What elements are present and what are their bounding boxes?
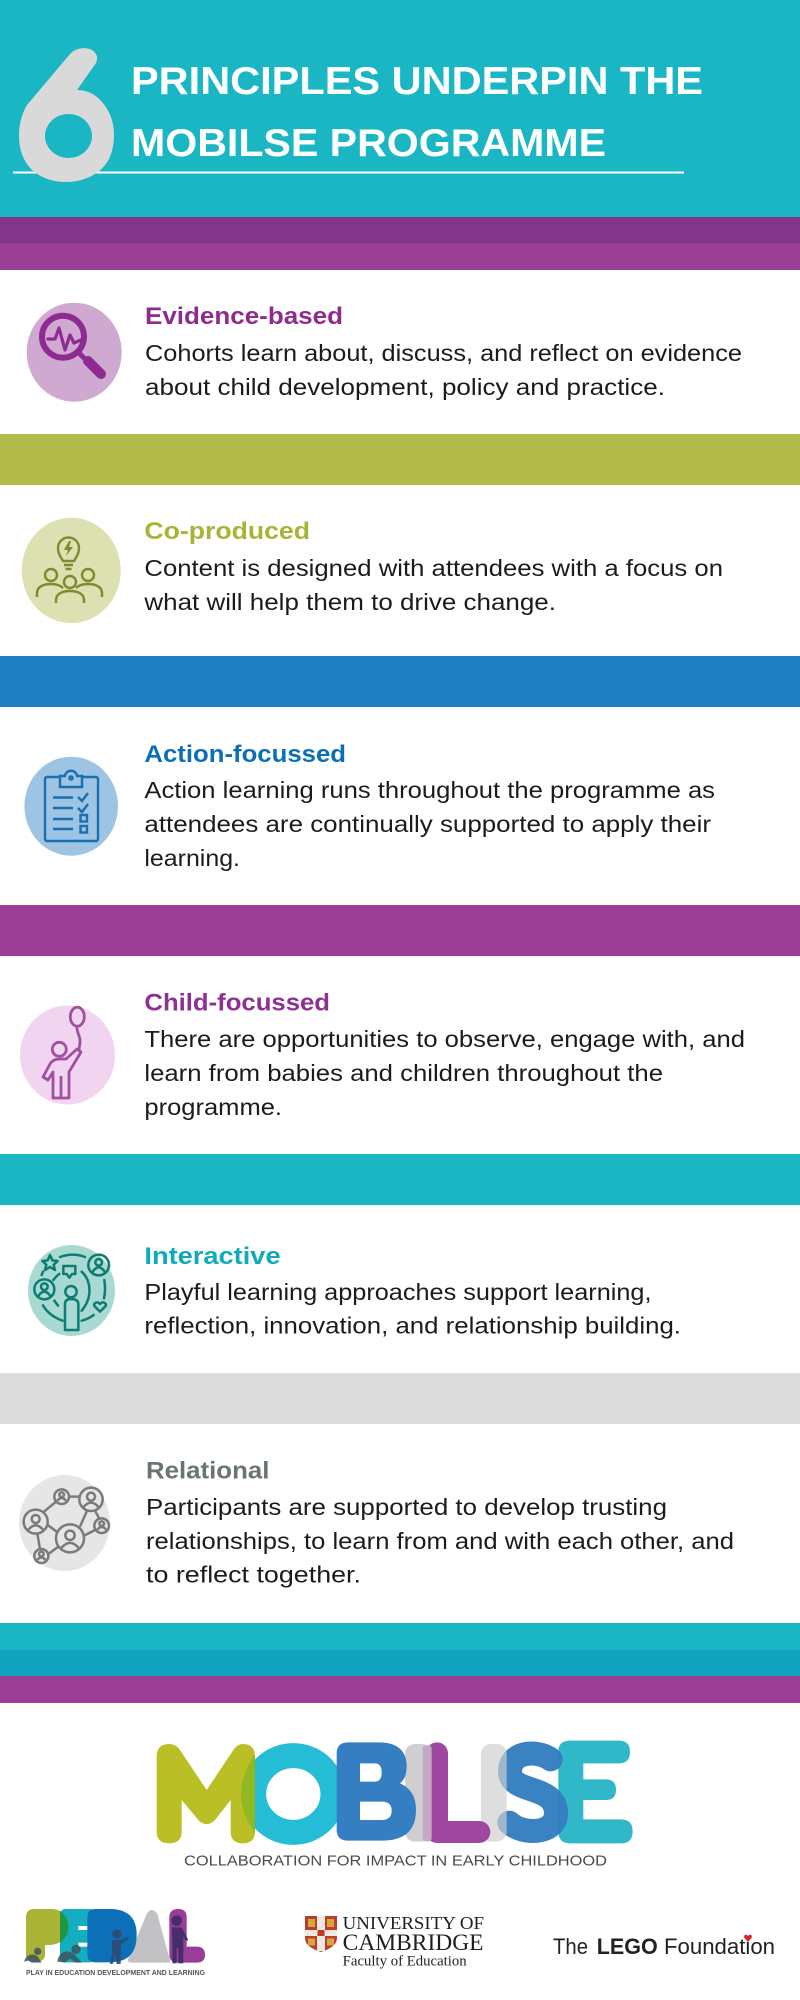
body text: Playful learning approaches support learning, [144,1279,652,1305]
letter L [437,1753,479,1832]
body text [146,1494,734,1588]
body text: Cohorts learn about, discuss, and reflect on evidence [145,340,742,366]
wordmark [343,1913,484,1969]
wordmark: CAMBRIDGE [343,1930,484,1955]
heading: Co-produced [144,518,310,545]
title: MOBILSE PROGRAMME [131,122,606,165]
body text: attendees are continually supported to apply their [144,811,711,837]
letter M [157,1744,255,1843]
logo: University of Cambridge [305,1913,484,1969]
letter E [558,1741,633,1843]
letter S [509,1754,556,1831]
icon: person surrounded by connections [28,1245,115,1336]
body text: Participants are supported to develop trusting [146,1494,667,1520]
logo: The LEGO Foundation: Foundation [664,1934,775,1959]
heading: Interactive [144,1243,281,1270]
body text: relationships, to learn from and with each other, and [146,1528,734,1554]
logo: The LEGO Foundation: LEGO [597,1934,658,1959]
second grey I [481,1744,507,1842]
icon: heart [744,1935,752,1942]
body text: programme. [144,1094,282,1120]
body text [144,777,715,871]
header underline [13,172,684,174]
header banner [0,0,800,217]
band: grey [0,1373,800,1424]
icon: lightbulb above team [22,518,121,623]
overlap of M and O [241,1755,255,1833]
PEDAL strapline: PLAY IN EDUCATION DEVELOPMENT AND LEARNING [26,1968,205,1977]
title: PRINCIPLES UNDERPIN THE [131,60,703,103]
band: blue [0,656,800,707]
icon: child with balloon [20,1006,115,1104]
wordmark: Faculty of Education [343,1953,467,1969]
heading: Relational [146,1458,269,1485]
logo: MOBILSE [157,1741,633,1843]
child silhouettes [24,1945,82,1963]
body text: about child development, policy and practice. [145,374,665,400]
panel: relational [19,1458,734,1588]
body text [144,1026,745,1120]
wordmark: UNIVERSITY OF [343,1913,484,1933]
title [131,60,703,165]
letter B [337,1742,416,1841]
icon: magnifying glass with pulse [27,303,122,402]
body text: learning. [144,845,240,871]
band: teal [0,1154,800,1205]
letter O [254,1756,333,1832]
overlap of I and L [423,1745,432,1841]
band: purple [0,905,800,956]
grey I [405,1744,432,1842]
big number 6 [19,48,114,182]
tagline: COLLABORATION FOR IMPACT IN EARLY CHILDHOOD [184,1853,607,1870]
body text: There are opportunities to observe, engage with, and [144,1026,745,1052]
body text: Content is designed with attendees with a focus on [144,555,723,581]
band: closing stripes [0,1623,800,1703]
body text [143,555,723,615]
icon: clipboard checklist [24,757,118,856]
panel: co-produced [22,518,723,623]
PEDAL letters [24,1909,205,1964]
body text: learn from babies and children throughout the [144,1060,663,1086]
panel: child-focussed [20,990,745,1120]
body text: Action learning runs throughout the programme as [144,777,715,803]
panel: interactive [28,1243,681,1338]
heading: Action-focussed [144,741,346,768]
logo: PEDAL [24,1909,205,1977]
band: purple double [0,217,800,270]
body text: what will help them to drive change. [143,589,556,615]
icon: Cambridge shield [305,1916,337,1952]
icon: network of people [19,1475,110,1571]
panel: evidence-based [27,303,742,402]
heading: Evidence-based [145,303,343,330]
logo: The LEGO Foundation [553,1934,775,1959]
body text: reflection, innovation, and relationship building. [144,1312,681,1338]
logo: The LEGO Foundation: The [553,1934,588,1959]
band: olive [0,434,800,485]
body text: to reflect together. [146,1562,361,1588]
panel: action-focussed [24,741,715,871]
heading: Child-focussed [144,990,330,1017]
body text [144,1279,681,1338]
body text [145,340,742,400]
